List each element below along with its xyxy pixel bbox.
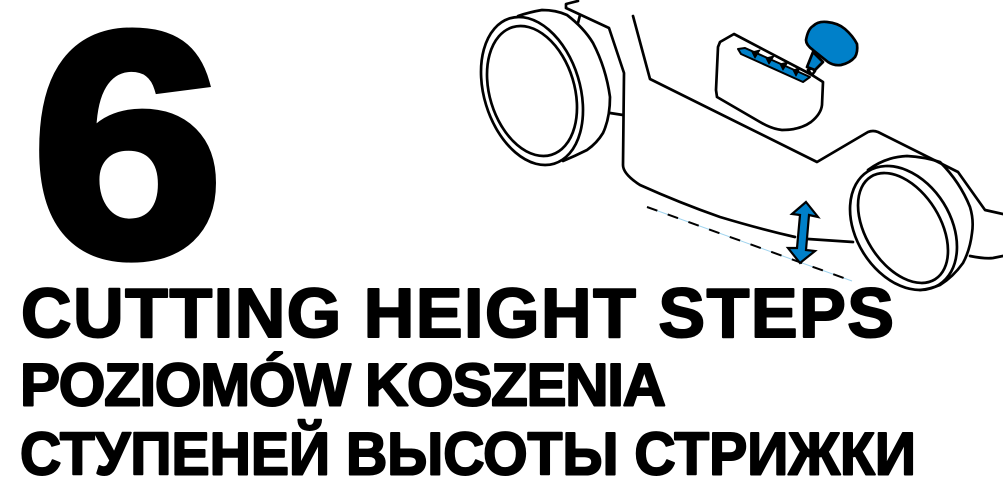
mower body outline [566, 1, 1003, 258]
cutting height double arrow [788, 202, 818, 263]
cutting height reference line [647, 207, 852, 281]
heading: English: CUTTING HEIGHT STEPS [21, 274, 894, 352]
heading: Polish: POZIOMÓW KOSZENIA [20, 352, 666, 418]
rear wheel [464, 4, 610, 178]
height control housing [716, 34, 823, 130]
heading: Russian: СТУПЕНЕЙ ВЫСОТЫ СТРИЖКИ [20, 420, 916, 488]
height adjustment lever knob [806, 22, 857, 75]
front wheel [828, 146, 979, 310]
mower illustration [464, 1, 1003, 310]
height adjustment slot [738, 48, 810, 82]
